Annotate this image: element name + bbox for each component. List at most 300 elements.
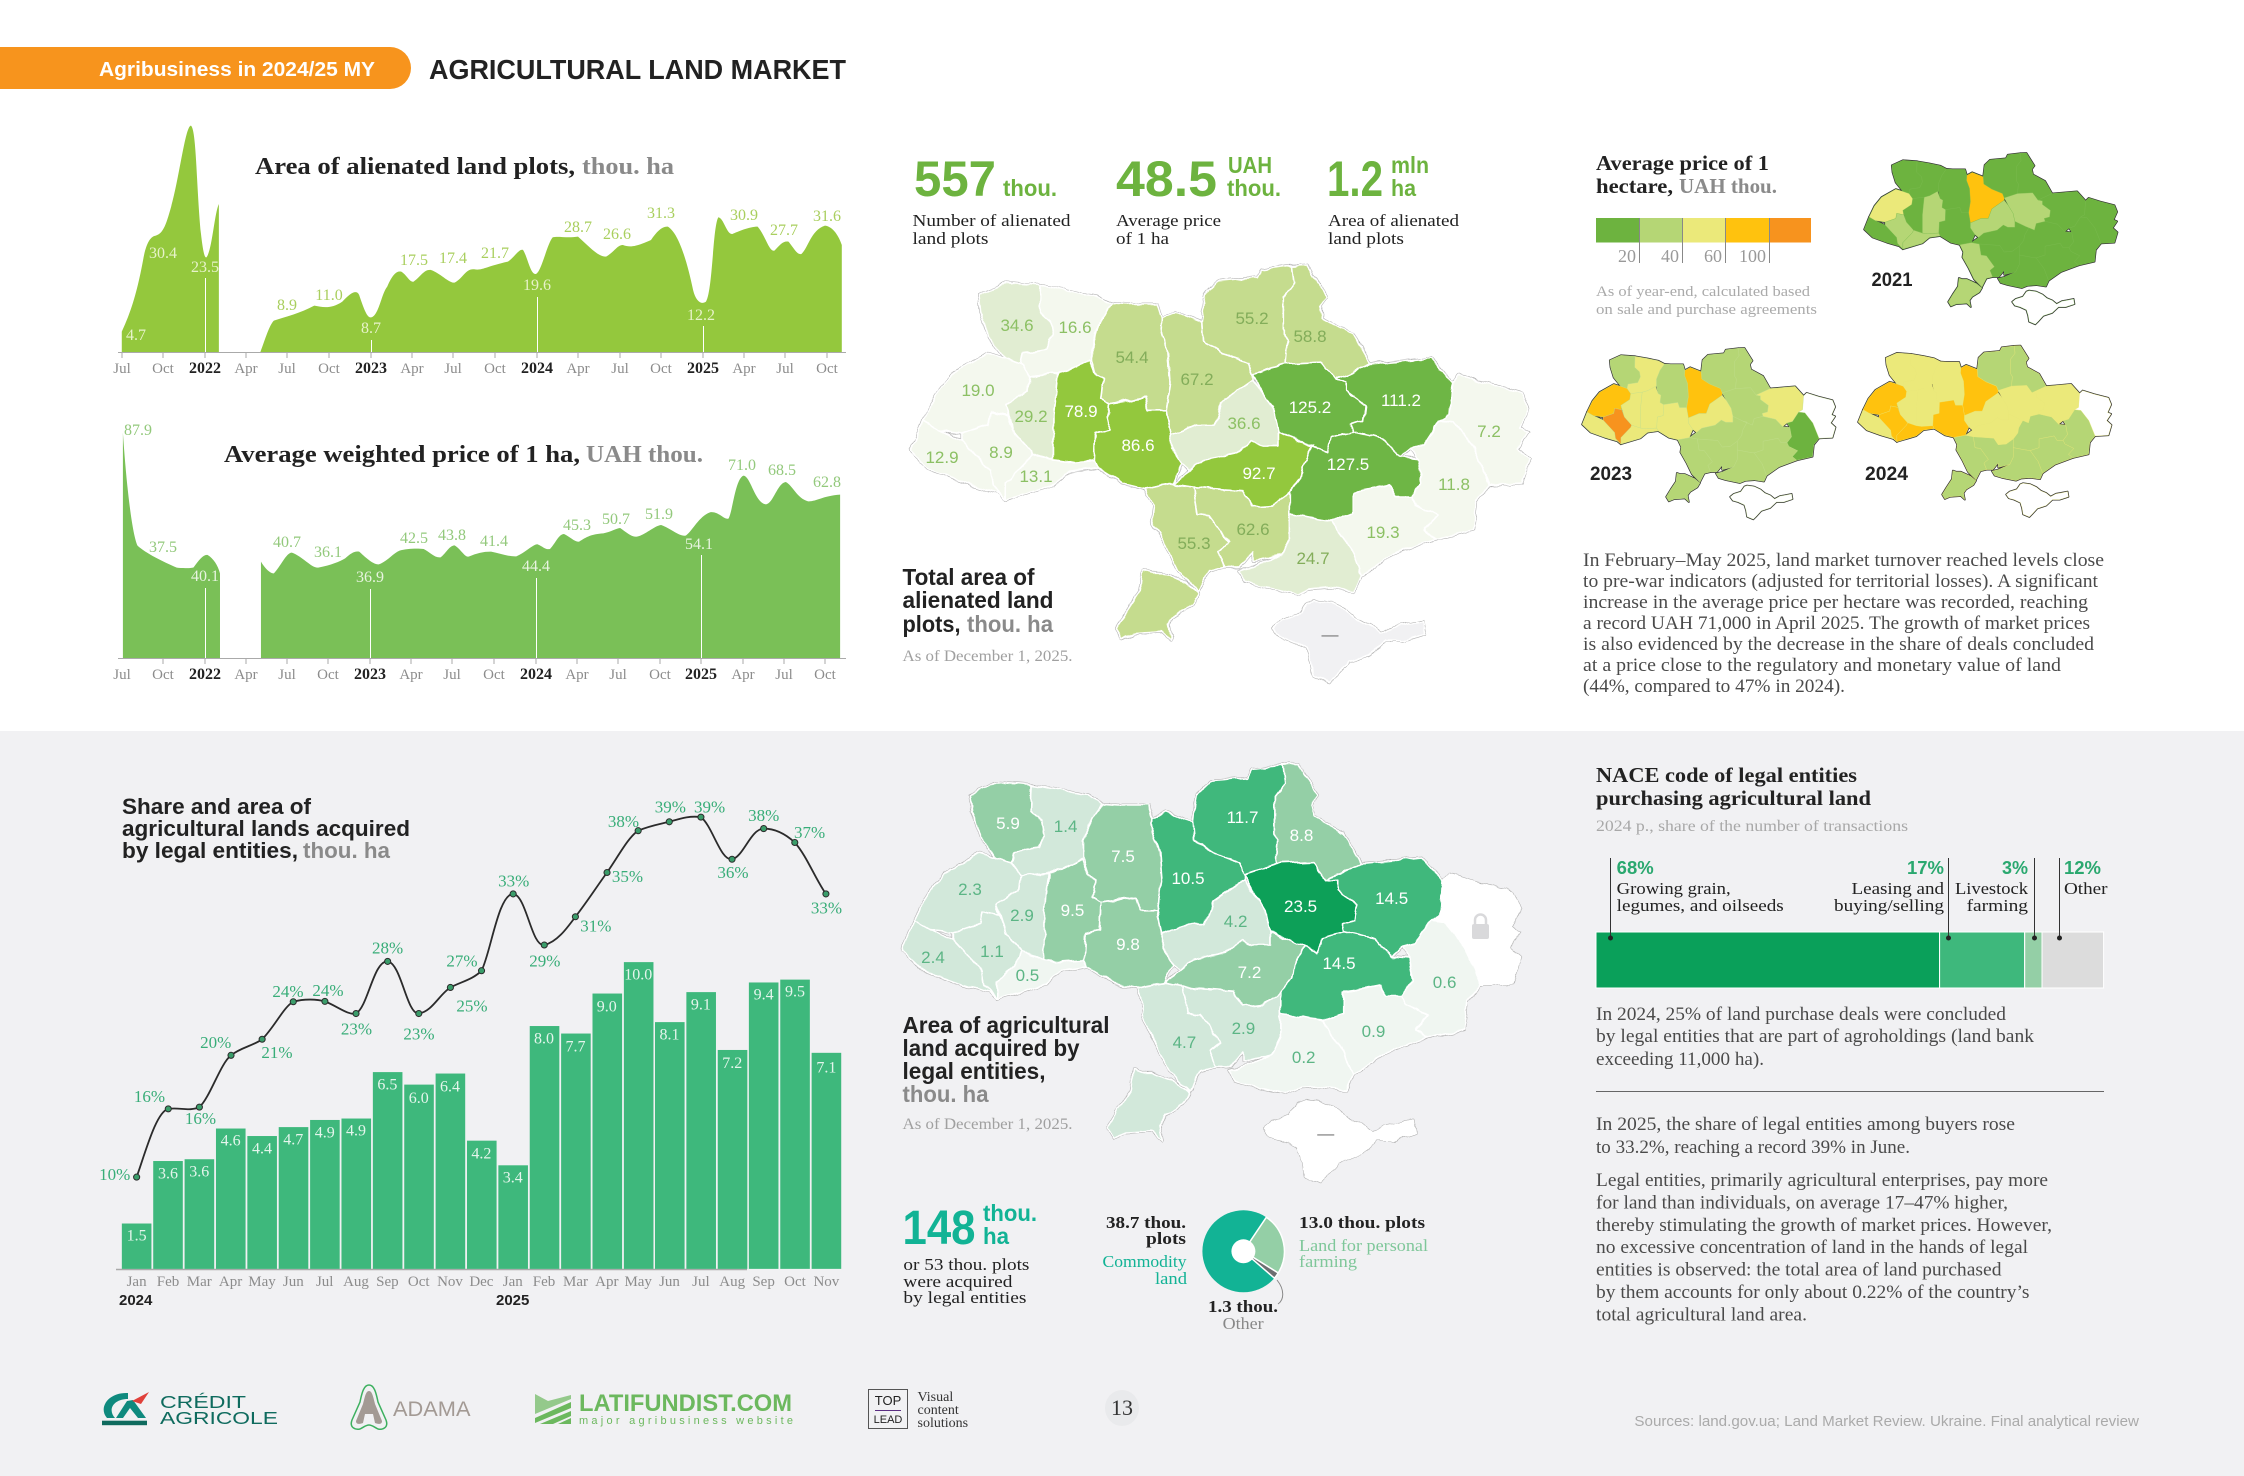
bar values: 7.1 xyxy=(816,1060,836,1076)
region values: 55.2 xyxy=(1235,309,1269,328)
bar values: 7.2 xyxy=(722,1055,742,1072)
map regions xyxy=(902,764,1520,1182)
chart: share and area acquired by legal entities xyxy=(99,794,842,1309)
value labels: 42.5 xyxy=(400,530,428,547)
background: white page xyxy=(0,0,2244,731)
share labels: 21% xyxy=(261,1043,293,1062)
region values: 19.3 xyxy=(1366,523,1400,542)
logo: Credit Agricole: AGRICOLE xyxy=(160,1408,278,1428)
stat: number of plots: Number of alienated xyxy=(912,211,1071,230)
small map: 2021 xyxy=(1864,153,2117,324)
text block: land market commentary: at a price close to the regulatory and monetary value of land xyxy=(1583,655,2062,676)
axis labels: 2024 xyxy=(520,666,552,683)
map heading: Total area of xyxy=(902,564,1035,590)
key figures xyxy=(912,151,1460,248)
region values: 8.8 xyxy=(1290,826,1313,845)
donut segments xyxy=(1202,1210,1284,1292)
value labels: 31.6 xyxy=(813,208,841,225)
region values: 10.5 xyxy=(1171,869,1205,888)
region values: 16.6 xyxy=(1058,318,1092,337)
map: total area of alienated land plots xyxy=(911,265,1529,683)
value labels: 41.4 xyxy=(480,533,508,550)
month labels: Mar xyxy=(563,1274,588,1290)
share labels: 33% xyxy=(811,898,842,918)
bar values: 6.0 xyxy=(409,1090,429,1107)
month labels: May xyxy=(248,1274,276,1290)
month labels: Nov xyxy=(813,1274,840,1290)
region values: 7.2 xyxy=(1477,422,1501,441)
region values: 14.5 xyxy=(1375,889,1408,908)
region values: 4.7 xyxy=(1173,1033,1196,1052)
text block: legal entities share: thereby stimulating the growth of market prices. However, xyxy=(1596,1215,2052,1236)
personal farming label: farming xyxy=(1299,1252,1358,1271)
stat: area: mln xyxy=(1391,152,1429,178)
share labels: 28% xyxy=(372,938,403,958)
logo: Top Lead: Visual xyxy=(918,1390,953,1405)
value labels: 26.6 xyxy=(603,226,631,243)
axis labels: Jul xyxy=(113,667,131,683)
bar values: 4.2 xyxy=(471,1146,491,1162)
chart title: thou. ha xyxy=(582,154,674,180)
segment labels: Other xyxy=(2064,879,2108,898)
region values: 0.2 xyxy=(1292,1048,1316,1067)
text block: agroholdings: exceeding 11,000 ha). xyxy=(1596,1049,1764,1070)
colour scale: 60 xyxy=(1704,246,1722,266)
region values: 0.9 xyxy=(1362,1022,1385,1041)
share labels: 33% xyxy=(498,872,529,891)
footer xyxy=(102,1385,2139,1431)
region values: 4.2 xyxy=(1224,912,1247,931)
axis labels: Apr xyxy=(234,361,258,377)
axis labels: Oct xyxy=(483,667,506,683)
region values: 54.4 xyxy=(1115,348,1149,367)
stat: 148 thou. ha: 148 xyxy=(902,1202,976,1255)
share labels: 37% xyxy=(794,823,825,842)
chart title: thou. ha xyxy=(303,838,391,863)
bar values: 8.1 xyxy=(660,1026,680,1044)
value labels: 21.7 xyxy=(481,245,509,262)
text block: legal entities share xyxy=(1596,1114,2052,1326)
stat: area xyxy=(1327,151,1460,248)
donut chart: land purpose xyxy=(1102,1210,1428,1333)
commodity land label: plots xyxy=(1146,1229,1186,1248)
region values: 2.3 xyxy=(958,880,982,899)
axis labels: Jul xyxy=(278,667,296,683)
stat: number of plots: 557 xyxy=(914,151,996,207)
other label: 1.3 thou. xyxy=(1208,1297,1278,1316)
axis labels: Jul xyxy=(776,361,794,377)
legend note: on sale and purchase agreements xyxy=(1596,302,1817,318)
other label: Other xyxy=(1223,1314,1264,1333)
region values: 24.7 xyxy=(1296,549,1330,568)
chart title xyxy=(122,794,410,863)
bar values: 9.0 xyxy=(597,998,617,1016)
region values: 86.6 xyxy=(1121,436,1155,455)
legend heading xyxy=(1596,151,1777,198)
region values: 29.2 xyxy=(1014,407,1048,426)
commodity land label: land xyxy=(1155,1269,1188,1288)
colour scale: 40 xyxy=(1661,246,1679,266)
region values: 9.5 xyxy=(1061,901,1084,920)
chart title xyxy=(255,154,674,180)
axis labels: Oct xyxy=(650,361,673,377)
bar values: 6.5 xyxy=(377,1076,397,1094)
axis labels: Jul xyxy=(611,361,629,377)
share labels: 27% xyxy=(446,952,478,971)
map heading: alienated land xyxy=(902,587,1054,613)
region values: 111.2 xyxy=(1381,391,1421,410)
month labels: Jul xyxy=(316,1274,333,1290)
chart title xyxy=(224,442,703,468)
region values: 1.1 xyxy=(980,942,1004,961)
value labels: 45.3 xyxy=(563,517,591,534)
stat: average price: Average price xyxy=(1116,211,1221,230)
bar values: 10.0 xyxy=(624,966,652,984)
bar values: 3.6 xyxy=(189,1164,209,1180)
legend heading: Average price of 1 xyxy=(1596,151,1769,175)
panel heading: purchasing agricultural land xyxy=(1596,786,1871,810)
month labels: Dec xyxy=(469,1274,494,1290)
share labels: 23% xyxy=(341,1020,372,1039)
value labels: 31.3 xyxy=(647,205,675,222)
logo: Latifundist xyxy=(535,1390,793,1427)
stat: area: Area of alienated xyxy=(1328,211,1460,230)
region values: 0.5 xyxy=(1016,966,1039,985)
bar values: 7.7 xyxy=(566,1038,586,1056)
segment labels xyxy=(1617,858,2108,915)
legend note: As of year-end, calculated based xyxy=(1596,284,1811,300)
axis labels: Oct xyxy=(649,667,672,683)
share labels: 20% xyxy=(200,1033,231,1052)
share labels: 31% xyxy=(580,917,611,936)
text block: land market commentary: to pre-war indicators (adjusted for territorial losses). A significant xyxy=(1583,571,2099,592)
value labels: 27.7 xyxy=(770,222,798,239)
axis labels: Jul xyxy=(278,361,296,377)
region values: 58.8 xyxy=(1293,327,1327,346)
map heading: land acquired by xyxy=(902,1035,1080,1061)
axis labels: Apr xyxy=(400,361,424,377)
stat: 148 thou. ha: were acquired xyxy=(903,1272,1013,1291)
personal farming label xyxy=(1299,1213,1428,1271)
text block: legal entities share: entities is observed: the total area of land purchased xyxy=(1596,1260,2002,1280)
region values: 8.9 xyxy=(989,443,1013,462)
share labels: 24% xyxy=(312,981,344,1000)
chart: area of alienated land plots xyxy=(113,126,846,377)
bar values: 4.9 xyxy=(346,1122,366,1140)
axis labels: Jul xyxy=(113,361,131,377)
region values: 5.9 xyxy=(996,814,1020,833)
region values: 7.2 xyxy=(1238,963,1261,982)
segment labels: 12% xyxy=(2064,858,2101,878)
bar values: 9.1 xyxy=(691,996,711,1014)
panel heading: 2024 p., share of the number of transactions xyxy=(1596,818,1908,835)
axis xyxy=(118,658,846,664)
value labels: 62.8 xyxy=(813,474,841,491)
text block: legal entities share: to 33.2%, reaching a record 39% in June. xyxy=(1596,1137,1910,1158)
map heading: plots, xyxy=(902,611,960,637)
value labels: 17.4 xyxy=(439,250,467,267)
stat: number of plots xyxy=(912,151,1071,248)
year markers xyxy=(206,278,704,352)
map heading: As of December 1, 2025. xyxy=(902,1116,1072,1133)
segment labels: farming xyxy=(1967,896,2029,915)
axis labels: Apr xyxy=(566,361,590,377)
month labels: Apr xyxy=(219,1274,242,1290)
month labels: Feb xyxy=(157,1274,179,1290)
commodity land label xyxy=(1102,1213,1188,1288)
value labels: 40.7 xyxy=(273,534,301,551)
month labels: May xyxy=(624,1274,652,1290)
axis labels: Oct xyxy=(318,361,341,377)
value labels: 54.1 xyxy=(685,536,713,553)
month labels: Sep xyxy=(376,1274,399,1290)
value labels: 40.1 xyxy=(191,568,219,585)
chart title: agricultural lands acquired xyxy=(122,816,410,841)
logo: Credit Agricole: CRÉDIT xyxy=(160,1392,246,1412)
month labels: Oct xyxy=(408,1274,430,1290)
stat: 148 thou. ha: ha xyxy=(983,1223,1009,1249)
value labels: 37.5 xyxy=(149,539,177,556)
share labels: 29% xyxy=(529,952,560,971)
section pill xyxy=(0,47,411,89)
value labels: 87.9 xyxy=(124,422,152,439)
colour scale: 20 xyxy=(1618,246,1636,266)
region values xyxy=(921,808,1456,1143)
callout line xyxy=(1277,1280,1283,1304)
page number xyxy=(1105,1390,1139,1426)
share labels: 39% xyxy=(655,797,686,816)
month labels: Jul xyxy=(692,1274,710,1290)
chart title: Area of alienated land plots, xyxy=(255,154,575,180)
bars xyxy=(122,962,841,1269)
month labels: Jan xyxy=(127,1274,147,1290)
region values: 78.9 xyxy=(1064,402,1098,421)
legend heading: hectare, xyxy=(1596,174,1673,198)
share labels: 16% xyxy=(185,1109,216,1128)
region values: 7.5 xyxy=(1111,847,1135,866)
region values: 9.8 xyxy=(1116,935,1140,954)
value labels: 30.9 xyxy=(730,207,758,224)
axis labels: Apr xyxy=(732,361,756,377)
month labels: Oct xyxy=(784,1274,807,1290)
value labels: 30.4 xyxy=(149,245,177,262)
axis labels: 2022 xyxy=(189,666,221,683)
stat: area: ha xyxy=(1391,175,1416,201)
stat: average price: 48.5 xyxy=(1116,151,1217,207)
colour scale xyxy=(1596,218,1811,266)
value labels: 36.1 xyxy=(314,544,342,561)
year markers xyxy=(206,555,702,658)
axis labels xyxy=(113,666,837,683)
pointers xyxy=(1608,858,2062,940)
text block: legal entities share: for land than individuals, on average 17–47% higher, xyxy=(1596,1192,2008,1214)
stat: area: land plots xyxy=(1328,229,1404,248)
text block: land market commentary xyxy=(1583,550,2104,697)
region values: 125.2 xyxy=(1289,398,1331,417)
bar values: 9.5 xyxy=(785,984,805,1000)
axis labels: Oct xyxy=(152,667,175,683)
map regions xyxy=(911,265,1529,683)
icon: lock xyxy=(1472,915,1489,939)
text block: legal entities share: Legal entities, primarily agricultural enterprises, pay more xyxy=(1596,1170,2048,1191)
month labels: Jun xyxy=(283,1274,304,1290)
axis labels: Oct xyxy=(814,667,837,683)
month labels: Sep xyxy=(752,1274,775,1290)
text block: land market commentary: increase in the average price per hectare was recorded, reaching xyxy=(1583,592,2089,613)
axis labels: Jul xyxy=(775,667,793,683)
small map: 2024 xyxy=(1858,346,2111,517)
bar values: 6.4 xyxy=(440,1078,460,1096)
value labels: 19.6 xyxy=(523,277,551,294)
share labels: 35% xyxy=(612,867,643,886)
region values: 12.9 xyxy=(925,448,959,467)
text block: legal entities share: total agricultural land area. xyxy=(1596,1304,1807,1326)
share labels: 36% xyxy=(717,863,749,882)
bar values: 8.0 xyxy=(534,1030,554,1048)
region values: 2.9 xyxy=(1232,1019,1255,1038)
stat: number of plots: thou. xyxy=(1003,175,1057,201)
bar values: 4.7 xyxy=(283,1132,303,1148)
value labels: 23.5 xyxy=(191,259,219,276)
page title: AGRICULTURAL LAND MARKET xyxy=(429,54,846,85)
value labels: 71.0 xyxy=(728,457,756,474)
axis labels: 2025 xyxy=(685,666,717,683)
segment labels: 68% xyxy=(1617,858,1654,878)
stat: average price: thou. xyxy=(1227,175,1281,201)
panel: NACE code xyxy=(1596,763,2108,1326)
area series xyxy=(122,126,842,352)
month labels: Jan xyxy=(503,1274,523,1290)
personal farming label: 13.0 thou. plots xyxy=(1299,1213,1425,1232)
bar values: 1.5 xyxy=(127,1228,147,1244)
axis labels: 2023 xyxy=(355,360,387,377)
region values: — xyxy=(1317,1124,1334,1143)
value labels: 43.8 xyxy=(438,527,466,544)
value labels: 28.7 xyxy=(564,219,592,236)
axis labels: Apr xyxy=(565,667,589,683)
logo: Adama xyxy=(351,1385,470,1429)
map heading: thou. ha xyxy=(902,1081,989,1107)
value labels: 50.7 xyxy=(602,511,630,528)
region values xyxy=(925,309,1501,644)
axis labels: 2024 xyxy=(521,360,553,377)
logo: Top Lead: solutions xyxy=(918,1416,968,1431)
legend note xyxy=(1596,284,1817,318)
stat: number of plots: land plots xyxy=(912,229,988,248)
panel heading xyxy=(1596,763,1908,835)
month labels xyxy=(119,1274,840,1309)
text block: legal entities share: no excessive concentration of land in the hands of legal xyxy=(1596,1237,2028,1258)
axis xyxy=(116,1268,747,1270)
panel: average price legend xyxy=(1596,151,1817,318)
axis labels: Jul xyxy=(609,667,627,683)
stacked bar xyxy=(1596,932,2104,988)
region values: — xyxy=(1322,625,1338,644)
colour scale: 100 xyxy=(1739,246,1766,266)
region values: 0.6 xyxy=(1433,973,1456,992)
region values: 92.7 xyxy=(1242,464,1276,483)
month labels: Feb xyxy=(533,1274,555,1290)
region values: 23.5 xyxy=(1284,897,1317,916)
value labels: 4.7 xyxy=(126,327,146,344)
region values: 13.1 xyxy=(1019,467,1053,486)
region values: 14.5 xyxy=(1322,954,1356,973)
month labels: Jun xyxy=(659,1274,680,1290)
area series xyxy=(123,433,840,658)
bar values: 9.4 xyxy=(754,986,774,1004)
value labels: 44.4 xyxy=(522,558,550,575)
logo: Adama: ADAMA xyxy=(393,1398,470,1421)
axis labels: 2022 xyxy=(189,360,221,377)
text block: agroholdings xyxy=(1596,1004,2035,1070)
value labels: 11.0 xyxy=(315,287,343,304)
value labels: 8.9 xyxy=(277,297,297,314)
map heading: Area of agricultural xyxy=(902,1012,1110,1038)
month labels: 2024 xyxy=(119,1292,153,1309)
region values: 62.6 xyxy=(1236,520,1270,539)
map heading: thou. ha xyxy=(967,611,1053,637)
axis labels: Apr xyxy=(399,667,423,683)
axis labels: Apr xyxy=(234,667,258,683)
text block: land market commentary: is also evidenced by the decrease in the share of deals concluded xyxy=(1583,634,2095,655)
page number: 13 xyxy=(1111,1395,1133,1420)
stat: 148 thou. ha: thou. xyxy=(983,1200,1037,1226)
month labels: Mar xyxy=(187,1274,212,1290)
stat: average price: of 1 ha xyxy=(1116,229,1169,248)
bar values: 4.4 xyxy=(252,1140,272,1158)
small map: 2023 xyxy=(1582,348,1835,519)
axis labels: Jul xyxy=(443,667,461,683)
region values: 67.2 xyxy=(1180,370,1214,389)
region values: 2.9 xyxy=(1010,906,1034,925)
legend heading: UAH thou. xyxy=(1679,174,1777,198)
chart title: Share and area of xyxy=(122,794,312,819)
commodity land label: 38.7 thou. xyxy=(1106,1213,1186,1232)
map heading: As of December 1, 2025. xyxy=(902,648,1072,665)
share labels: 16% xyxy=(134,1087,165,1106)
logo: Top Lead: TOP xyxy=(875,1393,901,1408)
map heading xyxy=(902,1012,1110,1133)
chart title: Average weighted price of 1 ha, xyxy=(224,442,580,468)
logo: Top Lead xyxy=(868,1390,968,1431)
axis labels: 2023 xyxy=(354,666,386,683)
value labels: 17.5 xyxy=(400,252,428,269)
axis labels xyxy=(113,360,839,377)
segment labels: 17% xyxy=(1907,858,1944,878)
logo: Latifundist: major agribusiness website xyxy=(579,1415,793,1427)
year label: 2024 xyxy=(1865,464,1908,485)
share labels: 38% xyxy=(748,806,779,825)
commodity land label: Commodity xyxy=(1102,1252,1187,1271)
value labels: 51.9 xyxy=(645,506,673,523)
text block: land market commentary: (44%, compared to 47% in 2024). xyxy=(1583,676,1845,697)
logo: Credit Agricole xyxy=(102,1392,278,1428)
month labels: Aug xyxy=(343,1274,369,1290)
logo: Latifundist: LATIFUNDIST.COM xyxy=(579,1390,792,1417)
chart title: by legal entities, xyxy=(122,838,298,863)
segment labels: Livestock xyxy=(1955,879,2029,898)
text block: agroholdings: In 2024, 25% of land purchase deals were concluded xyxy=(1596,1004,2007,1025)
value labels xyxy=(126,205,841,344)
share labels: 10% xyxy=(99,1165,130,1184)
bar values: 4.9 xyxy=(315,1124,335,1142)
header xyxy=(0,47,846,89)
month labels: Nov xyxy=(437,1274,463,1290)
value labels: 12.2 xyxy=(687,307,715,324)
stat: 148 thou. ha xyxy=(902,1200,1037,1307)
value labels: 8.7 xyxy=(361,320,381,337)
region values: 127.5 xyxy=(1327,455,1369,474)
